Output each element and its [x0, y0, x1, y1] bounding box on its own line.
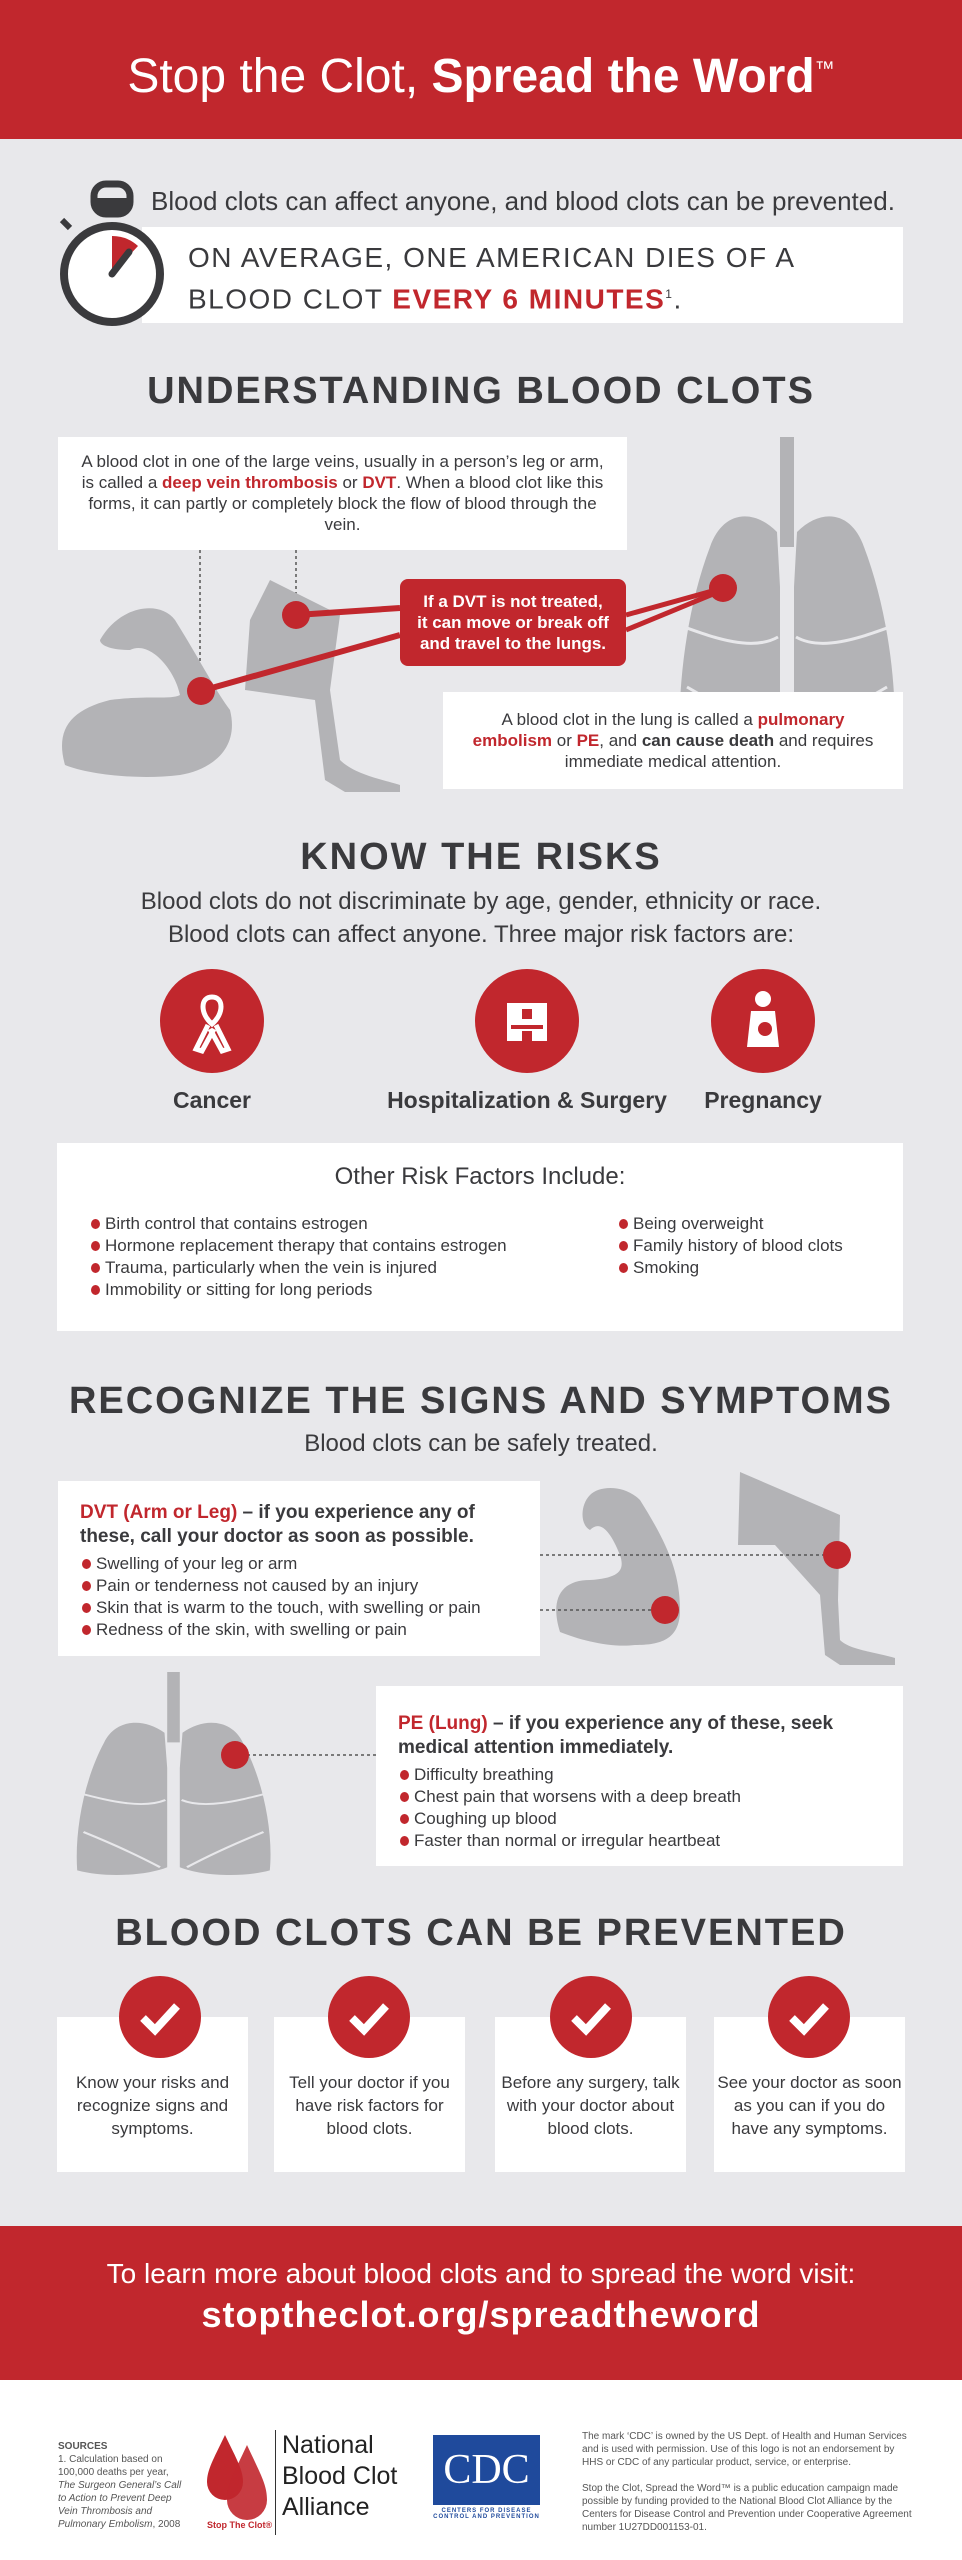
- illustration: lungs symptoms: [76, 1672, 376, 1875]
- panel: PE symptoms: PE (Lung) – if you experience any of these, seek medical attention immediately.: [398, 1713, 833, 1758]
- panel: DVT symptoms: [58, 1481, 540, 1656]
- stat box: ON AVERAGE, ONE AMERICAN DIES OF A: [188, 242, 796, 273]
- callout: DVT travels: [400, 579, 626, 666]
- intro text: Blood clots can affect anyone, and blood clots can be prevented.: [151, 186, 895, 216]
- header banner: Stop the Clot, Spread the Word™: [127, 50, 835, 103]
- panel: DVT symptoms: DVT (Arm or Leg) – if you experience any of these, call your doctor as soon as possible.: [80, 1502, 475, 1547]
- legal text: The mark ‘CDC’ is owned by the US Dept. of Health and Human Services and is used with permission. Use of this logo is not an endorsement by HHS or CDC of any particular product, service, or enterprise.: [582, 2431, 907, 2468]
- subtitle: Blood clots can be safely treated.: [304, 1430, 658, 1457]
- footer call to action: [0, 2226, 962, 2380]
- risks intro: Blood clots do not discriminate by age, gender, ethnicity or race.: [141, 888, 821, 915]
- logo: NBCA: Alliance: [282, 2493, 370, 2521]
- panel: other risk factors: Family history of blood clots: [633, 1236, 843, 1255]
- heading: understanding: UNDERSTANDING BLOOD CLOTS: [147, 370, 815, 412]
- footer logos and sources: [0, 2380, 962, 2560]
- legal text: [582, 2431, 912, 2533]
- heading: signs and symptoms: RECOGNIZE THE SIGNS AND SYMPTOMS: [69, 1380, 893, 1422]
- panel: other risk factors: Other Risk Factors Include:: [335, 1163, 625, 1190]
- footer call to action: To learn more about blood clots and to spread the word visit:: [107, 2258, 855, 2289]
- panel: other risk factors: Birth control that contains estrogen: [105, 1214, 368, 1233]
- card: know risks: [57, 2017, 248, 2172]
- panel: other risk factors: Immobility or sitting for long periods: [105, 1280, 372, 1299]
- logo: CDC: CDC: [443, 2447, 530, 2493]
- card: tell doctor: [274, 2017, 465, 2172]
- panel: other risk factors: [57, 1143, 903, 1331]
- card: before surgery: Before any surgery, talk with your doctor about blood clots.: [501, 2073, 680, 2138]
- icon: check 2: [328, 1976, 410, 2058]
- callout: DVT travels: it can move or break off: [417, 613, 609, 632]
- heading: know the risks: KNOW THE RISKS: [300, 836, 662, 878]
- illustration: arm and leg symptoms: [540, 1472, 895, 1665]
- heading: prevented: BLOOD CLOTS CAN BE PREVENTED: [115, 1912, 847, 1954]
- stat box: [142, 227, 903, 323]
- panel: DVT symptoms: Redness of the skin, with swelling or pain: [96, 1620, 407, 1639]
- icon: check 1: [119, 1976, 201, 2058]
- logo: NBCA: Stop The Clot®: [207, 2520, 272, 2530]
- panel: other risk factors: Hormone replacement therapy that contains estrogen: [105, 1236, 507, 1255]
- legal text: Stop the Clot, Spread the Word™ is a public education campaign made possible by funding provided to the National Blood Clot Alliance by the Centers for Disease Control and Prevention under Cooperative Agreement number 1U27DD001153-01.: [582, 2483, 912, 2533]
- panel: PE symptoms: [376, 1686, 903, 1866]
- panel: other risk factors: Trauma, particularly when the vein is injured: [105, 1258, 437, 1277]
- logo: NBCA: [207, 2430, 398, 2535]
- panel: PE symptoms: Difficulty breathing: [414, 1765, 554, 1784]
- callout: DVT travels: If a DVT is not treated,: [423, 592, 603, 611]
- card: tell doctor: Tell your doctor if you have risk factors for blood clots.: [289, 2073, 450, 2138]
- text box: PE: A blood clot in the lung is called a pulmonary embolism or PE, and can cause death and requires immediate medical attention.: [473, 710, 873, 771]
- icon: cancer ribbon: [160, 969, 264, 1073]
- logo: NBCA: National: [282, 2431, 374, 2459]
- icon: check 3: [550, 1976, 632, 2058]
- callout: DVT travels: and travel to the lungs.: [420, 634, 606, 653]
- footer call to action: stoptheclot.org/spreadtheword: [201, 2294, 761, 2335]
- panel: PE symptoms: Faster than normal or irregular heartbeat: [414, 1831, 720, 1850]
- card: see doctor: [714, 2017, 905, 2172]
- logo: CDC: [433, 2435, 540, 2520]
- sources: 1. Calculation based on 100,000 deaths per year, The Surgeon General’s Call to Action to Prevent Deep Vein Thrombosis and Pulmonary Embolism, 2008: [58, 2454, 181, 2530]
- logo: NBCA: Blood Clot: [282, 2462, 397, 2490]
- risks intro: [141, 888, 821, 948]
- panel: PE symptoms: Chest pain that worsens with a deep breath: [414, 1787, 741, 1806]
- icon: pregnancy: [711, 969, 815, 1073]
- label: pregnancy: Pregnancy: [704, 1087, 822, 1113]
- panel: other risk factors: Smoking: [633, 1258, 699, 1277]
- sources: SOURCES: [58, 2441, 107, 2452]
- panel: DVT symptoms: Swelling of your leg or arm: [96, 1554, 297, 1573]
- icon: check 4: [768, 1976, 850, 2058]
- logo: CDC: CONTROL AND PREVENTION: [433, 2514, 540, 2520]
- panel: other risk factors: Being overweight: [633, 1214, 763, 1233]
- illustration: arm, leg, lungs with connectors: [62, 437, 894, 792]
- icon: hospital: [475, 969, 579, 1073]
- card: see doctor: See your doctor as soon as you can if you do have any symptoms.: [717, 2073, 902, 2138]
- icon: stopwatch: [60, 180, 164, 326]
- logo: CDC: CENTERS FOR DISEASE: [441, 2508, 532, 2514]
- label: cancer: Cancer: [173, 1087, 251, 1113]
- card: before surgery: [495, 2017, 686, 2172]
- panel: DVT symptoms: Skin that is warm to the touch, with swelling or pain: [96, 1598, 481, 1617]
- panel: DVT symptoms: Pain or tenderness not caused by an injury: [96, 1576, 418, 1595]
- stat box: BLOOD CLOT EVERY 6 MINUTES1.: [188, 283, 683, 314]
- risks intro: Blood clots can affect anyone. Three major risk factors are:: [168, 921, 794, 948]
- text box: PE: [443, 692, 903, 789]
- text box: DVT: [58, 437, 627, 550]
- label: hospitalization: Hospitalization & Surgery: [387, 1087, 667, 1113]
- text box: DVT: A blood clot in one of the large veins, usually in a person’s leg or arm, is called a deep vein thrombosis or DVT. When a blood clot like this forms, it can partly or completely block the flow of blood through the vein.: [81, 452, 604, 534]
- panel: PE symptoms: Coughing up blood: [414, 1809, 557, 1828]
- header banner: [0, 0, 962, 139]
- card: know risks: Know your risks and recognize signs and symptoms.: [76, 2073, 229, 2138]
